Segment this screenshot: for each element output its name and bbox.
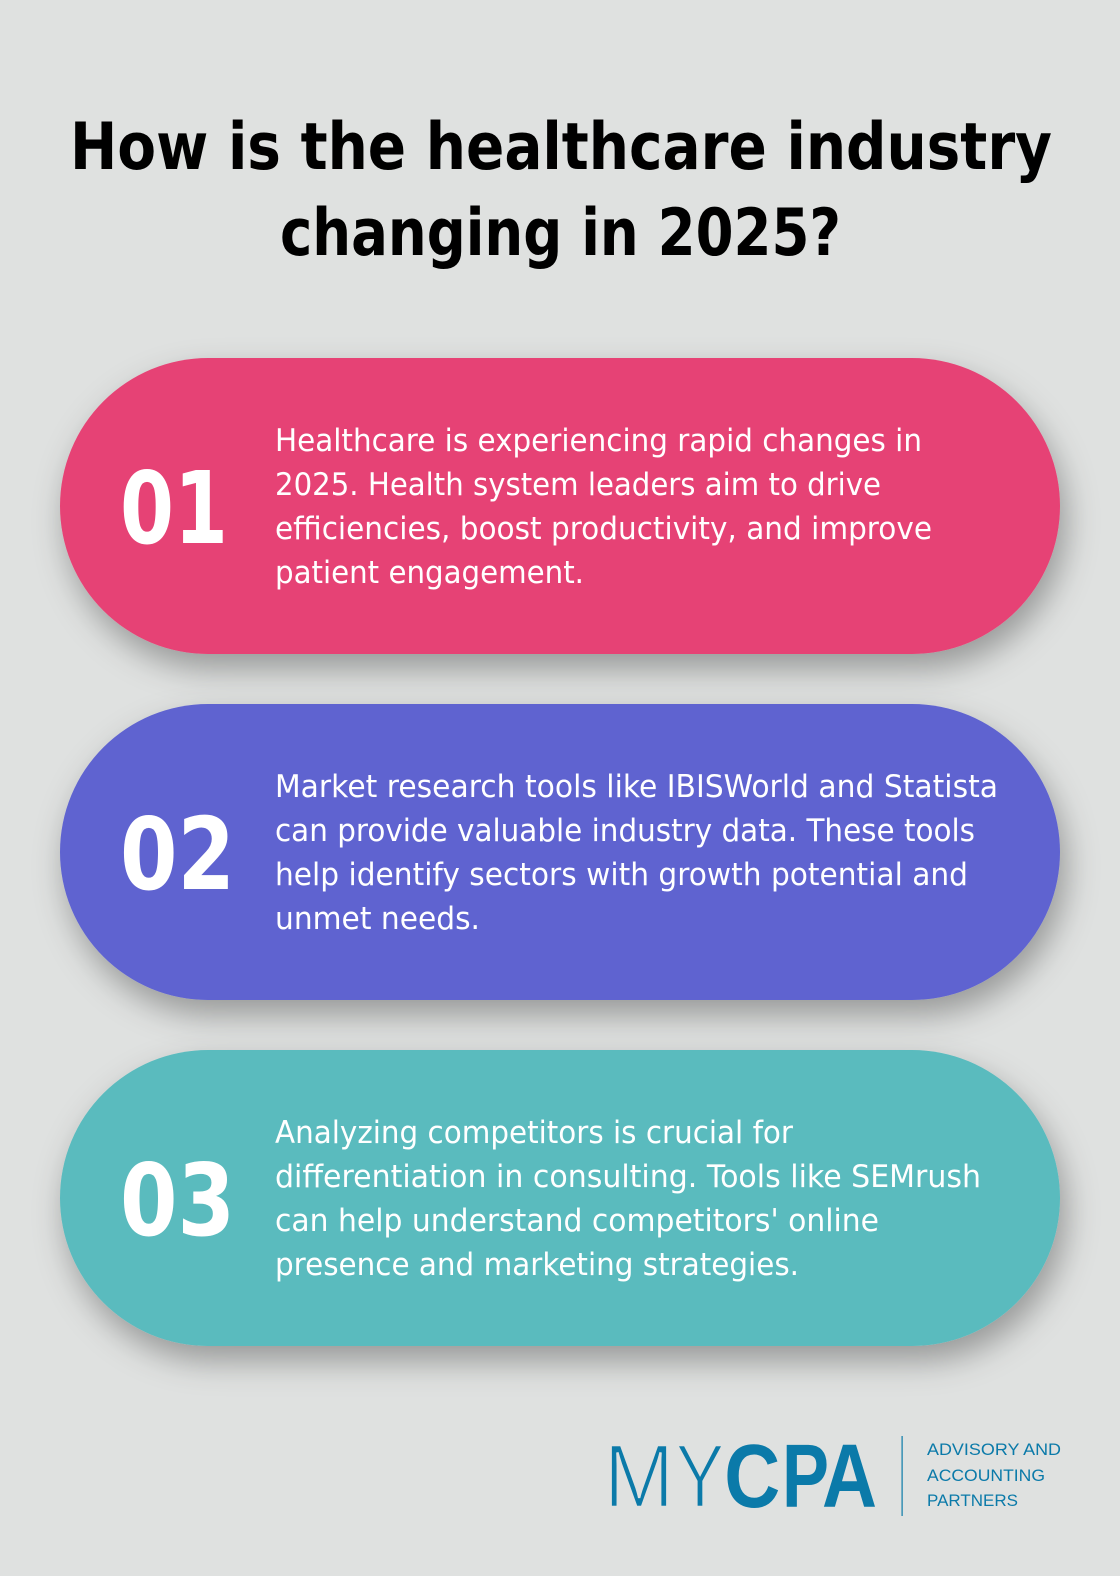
logo tagline: ACCOUNTING — [927, 1466, 1045, 1485]
title: changing in 2025? — [280, 196, 841, 271]
panel: card 02 — [60, 704, 1060, 1000]
card 01 text: efficiencies, boost productivity, and improve — [275, 511, 932, 547]
card 02 text: help identify sectors with growth potential and — [275, 857, 968, 893]
card 01 background — [60, 358, 1060, 654]
card 03 text: Analyzing competitors is crucial for — [275, 1115, 793, 1151]
card 02 text: Market research tools like IBISWorld and Statista — [275, 769, 998, 805]
panel: card 01 — [60, 358, 1060, 654]
card 02 text: can provide valuable industry data. These tools — [275, 813, 975, 849]
card 03 text — [275, 1115, 981, 1283]
card 01 number: 01 — [120, 450, 228, 567]
logo wordmark: P — [782, 1427, 829, 1527]
logo wordmark: C — [724, 1427, 780, 1527]
card 01 text: patient engagement. — [275, 555, 584, 591]
card 01 text — [275, 423, 932, 591]
logo wordmark: A — [822, 1427, 877, 1527]
panel: card 03 — [60, 1050, 1060, 1346]
card 03 text: presence and marketing strategies. — [275, 1247, 799, 1283]
card 03 text: differentiation in consulting. Tools like SEMrush — [275, 1159, 981, 1195]
logo tagline: ADVISORY AND — [927, 1440, 1061, 1459]
logo tagline — [927, 1440, 1061, 1510]
card 01 text: 2025. Health system leaders aim to drive — [275, 467, 881, 503]
card 03 number: 03 — [120, 1142, 235, 1259]
title — [70, 110, 1052, 271]
card 02 background — [60, 704, 1060, 1000]
card 02 text: unmet needs. — [275, 901, 480, 937]
card 01 text: Healthcare is experiencing rapid changes in — [275, 423, 922, 459]
card 02 text — [275, 769, 998, 937]
card 03 background — [60, 1050, 1060, 1346]
logo: MYCPA — [604, 1427, 1061, 1527]
card 03 text: can help understand competitors' online — [275, 1203, 879, 1239]
logo wordmark: M — [604, 1427, 674, 1527]
logo wordmark — [604, 1427, 877, 1527]
logo tagline: PARTNERS — [927, 1491, 1018, 1510]
logo wordmark: Y — [676, 1427, 724, 1527]
card 02 number: 02 — [120, 796, 235, 913]
